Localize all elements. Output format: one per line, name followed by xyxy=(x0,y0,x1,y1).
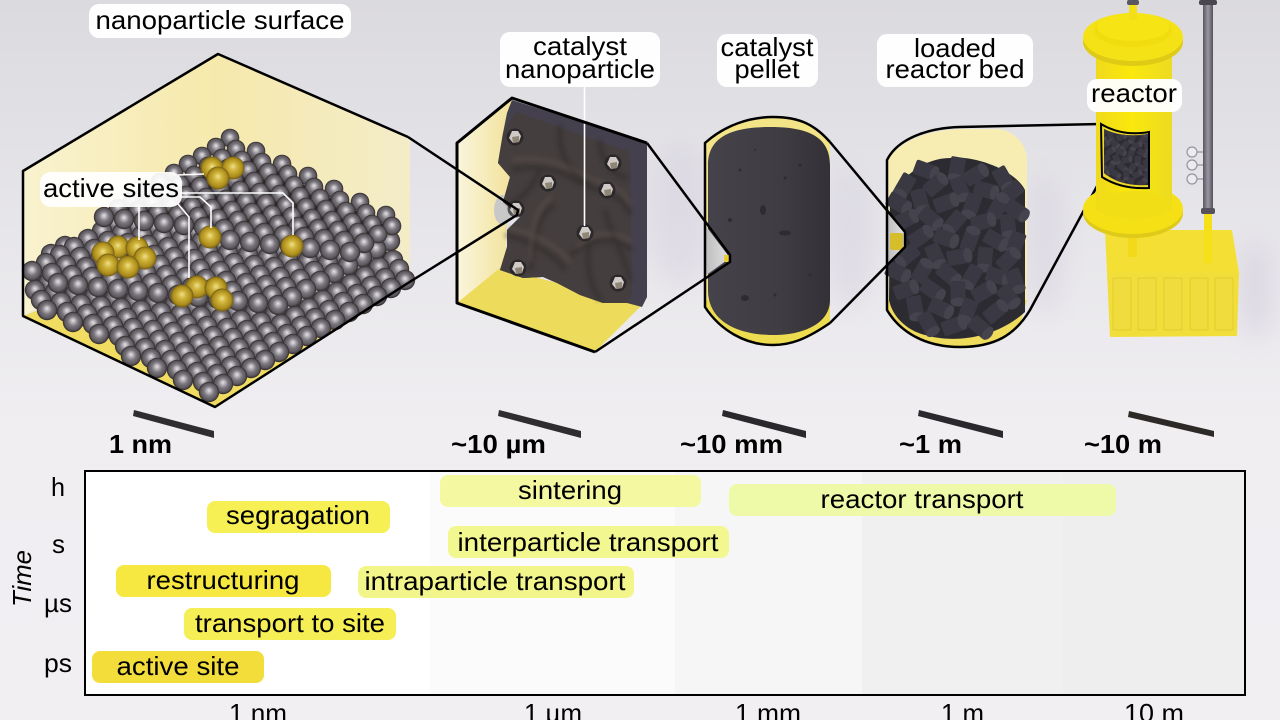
chart: time versus length scale xyxy=(85,471,1245,695)
label: nanoparticle surface: nanoparticle surface xyxy=(96,5,344,35)
y axis: time labels: h xyxy=(51,472,65,502)
y axis: time labels: ps xyxy=(44,648,72,678)
bar: reactor transport xyxy=(729,484,1116,516)
scale bar: 1 nm: 1 nm xyxy=(109,429,172,459)
pore surface xyxy=(498,112,632,303)
panel: nanoparticle surface xyxy=(22,54,518,407)
scale bar: 1 m xyxy=(899,410,1003,459)
scale bar: 10 m: ~10 m xyxy=(1084,429,1162,459)
label: catalyst nanoparticle: catalyst xyxy=(533,31,628,61)
scale bar: 10 um: ~10 µm xyxy=(451,429,546,459)
bar: interparticle transport: interparticle transport xyxy=(458,527,719,557)
top flange and dome xyxy=(1083,0,1183,66)
bar: intraparticle transport: intraparticle transport xyxy=(364,566,626,596)
reactor column xyxy=(1096,50,1172,210)
base box xyxy=(1105,230,1239,337)
icons: supported nanoparticles xyxy=(506,128,626,292)
scale bar: 1 nm xyxy=(109,410,214,459)
leader lines: active sites xyxy=(139,174,293,278)
scale bar: 10 um xyxy=(451,410,581,459)
bar: sintering xyxy=(440,475,701,507)
bar: restructuring xyxy=(116,565,331,597)
gold atoms on the lower terrace xyxy=(92,236,234,312)
bar: segragation xyxy=(207,500,390,533)
packed pellets xyxy=(884,156,1032,342)
bar: sintering: sintering xyxy=(518,475,622,505)
scale bar: 10 m xyxy=(1084,411,1214,459)
bar: active site xyxy=(92,651,264,683)
panel: loaded reactor bed xyxy=(830,124,1102,347)
pressure pipe xyxy=(1199,0,1217,263)
label: catalyst pellet: pellet xyxy=(734,54,800,84)
label: loaded reactor bed: reactor bed xyxy=(886,54,1024,84)
cutaway window xyxy=(1100,122,1150,190)
y axis: time labels xyxy=(7,472,72,678)
y axis: time labels: Time xyxy=(7,550,37,607)
panel: catalyst nanoparticle xyxy=(457,86,647,352)
zoom wedge from bed to pellet xyxy=(887,212,905,265)
zoom wedge from pellet to nanoparticle xyxy=(705,225,730,276)
bar: segragation: segragation xyxy=(226,500,370,530)
label: catalyst pellet xyxy=(717,32,818,87)
x axis: length labels xyxy=(229,698,1184,720)
y axis: time labels: s xyxy=(52,529,65,559)
bar: restructuring: restructuring xyxy=(146,565,300,595)
scale bar: 10 mm: ~10 mm xyxy=(680,429,783,459)
bar: transport to site: transport to site xyxy=(195,608,385,638)
bar: reactor transport: reactor transport xyxy=(820,484,1024,514)
scale bar: 1 m: ~1 m xyxy=(899,429,962,459)
gauges xyxy=(1187,147,1203,184)
label: active sites: active sites xyxy=(43,173,179,203)
label: loaded reactor bed xyxy=(877,33,1033,87)
lower flange xyxy=(1083,184,1183,238)
porous support xyxy=(498,100,647,307)
label: catalyst pellet: catalyst xyxy=(720,32,814,62)
panel: reactor xyxy=(1083,0,1239,337)
panel: catalyst pellet xyxy=(595,117,830,352)
y axis: time labels: µs xyxy=(44,588,72,618)
scale bar: 10 mm xyxy=(680,410,806,459)
bar: active site: active site xyxy=(116,651,240,681)
label: loaded reactor bed: loaded xyxy=(914,33,996,63)
label: reactor: reactor xyxy=(1091,78,1177,108)
gold atoms on the upper terrace xyxy=(198,156,304,258)
label: catalyst nanoparticle xyxy=(500,31,660,87)
label: catalyst nanoparticle: nanoparticle xyxy=(505,54,655,84)
pellet body xyxy=(708,127,830,335)
